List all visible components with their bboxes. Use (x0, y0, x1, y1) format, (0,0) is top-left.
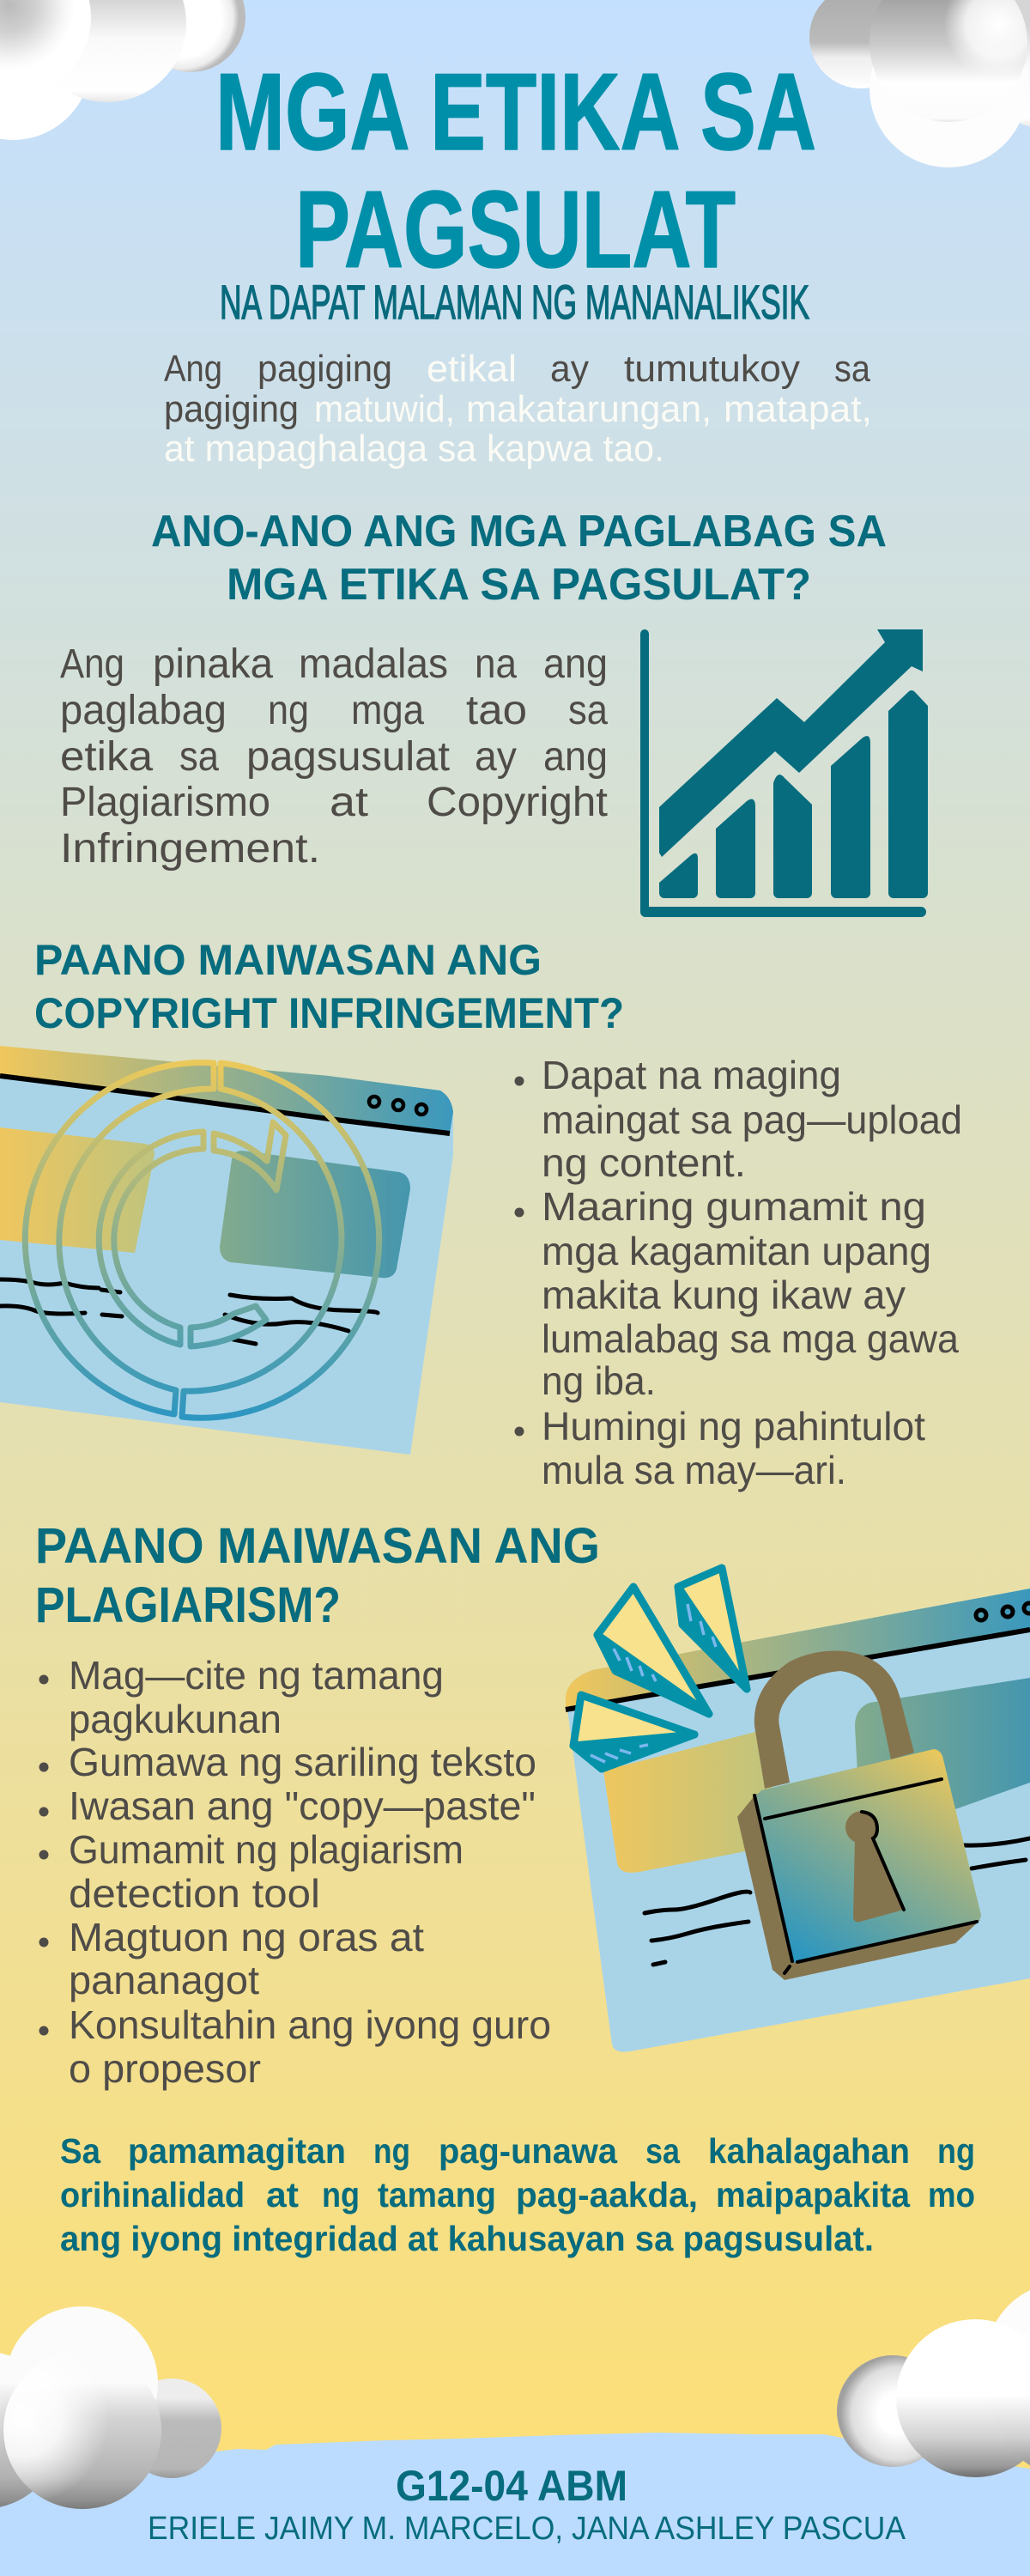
authors: ERIELE JAIMY M. MARCELO, JANA ASHLEY PASCUA (148, 2511, 906, 2547)
top right clouds (809, 0, 1030, 167)
list: copyright tips: lumalabag sa mga gawa (542, 1316, 959, 1361)
closing statement: ng (322, 2175, 360, 2215)
intro paragraph: makatarungan, (466, 388, 712, 430)
list: copyright tips: ng iba. (542, 1358, 656, 1403)
heading: copyright (34, 936, 624, 1037)
paragraph: pinaka madalas: Infringement. (60, 826, 320, 872)
burst rays (573, 1568, 747, 1769)
closing statement: Sa (60, 2131, 101, 2171)
list: copyright tips: mga kagamitan upang (542, 1229, 931, 1273)
list: plagiarism tips: detection tool (69, 1871, 320, 1916)
padlock side (737, 1794, 980, 1980)
paragraph: pinaka madalas: madalas (299, 641, 448, 687)
list: copyright tips: makita kung ikaw ay (542, 1273, 906, 1317)
paragraph: pinaka madalas: etika (60, 734, 153, 780)
list: plagiarism tips: Gumamit ng plagiarism (69, 1827, 464, 1872)
closing statement: at (266, 2175, 299, 2215)
intro paragraph: pagiging (164, 388, 299, 430)
heading: ano-ano: ANO-ANO ANG MGA PAGLABAG SA (151, 507, 887, 556)
title bar line and dots (566, 1603, 1030, 1710)
paragraph: pinaka madalas: pagsusulat (246, 734, 450, 780)
padlock front (756, 1749, 981, 1963)
illustration: browser window with padlock (566, 1568, 1030, 2052)
intro paragraph: matuwid, (314, 388, 455, 430)
intro paragraph: sa (834, 348, 870, 390)
list: plagiarism tips: Konsultahin ang iyong guro (69, 2002, 551, 2047)
list: plagiarism tips: Mag—cite ng tamang (69, 1653, 444, 1698)
intro paragraph: pagiging (258, 348, 392, 390)
closing statement: kahalagahan (708, 2131, 910, 2171)
paragraph: pinaka madalas: na (475, 641, 517, 687)
padlock shackle (754, 1650, 914, 1789)
class label: G12-04 ABM (396, 2462, 627, 2510)
paragraph: pinaka madalas: mga (351, 688, 424, 733)
title bar line and dots (0, 1076, 450, 1133)
intro paragraph: etikal (427, 348, 517, 390)
list: plagiarism tips: Gumawa ng sariling teksto (69, 1740, 536, 1784)
closing statement: orihinalidad (60, 2175, 245, 2215)
closing statement: ng (373, 2131, 410, 2171)
intro paragraph (164, 348, 872, 470)
closing statement: ang iyong integridad at kahusayan sa pagsusulat. (60, 2219, 874, 2258)
heading: ano-ano: MGA ETIKA SA PAGSULAT? (227, 560, 811, 610)
burst ray hatching (591, 1604, 716, 1762)
heading: ano-ano (151, 507, 887, 610)
heading: plagiarism (35, 1518, 600, 1633)
paragraph: pinaka madalas: paglabag (60, 688, 227, 733)
paragraph: pinaka madalas: Ang (60, 641, 124, 687)
intro paragraph: at mapaghalaga sa kapwa tao. (164, 428, 664, 470)
browser window body (0, 1046, 453, 1455)
list: copyright tips: mula sa may—ari. (542, 1448, 846, 1492)
heading: copyright: PAANO MAIWASAN ANG (34, 936, 542, 984)
browser title bar (566, 1589, 1030, 1710)
browser title bar (0, 1046, 453, 1133)
closing statement: ng (937, 2131, 975, 2171)
padlock keyhole (845, 1811, 904, 1922)
intro paragraph: tumutukoy (624, 348, 800, 390)
closing statement: mo (928, 2175, 975, 2215)
paragraph: pinaka madalas: ang (543, 641, 608, 687)
heading: plagiarism: PAANO MAIWASAN ANG (35, 1518, 600, 1574)
bottom right clouds (837, 2282, 1030, 2477)
scribble lines (645, 1838, 1030, 1965)
content blocks (603, 1728, 772, 1873)
list: copyright tips: Dapat na maging (542, 1053, 841, 1097)
paragraph: pinaka madalas: Copyright (427, 780, 608, 825)
paragraph: pinaka madalas (60, 641, 608, 872)
list: plagiarism tips (39, 1653, 551, 2091)
closing statement: pamamagitan (128, 2131, 346, 2171)
paragraph: pinaka madalas: Plagiarismo (60, 780, 270, 825)
list: copyright tips: Humingi ng pahintulot (542, 1404, 925, 1449)
footer band (0, 2433, 1030, 2576)
closing statement (60, 2131, 975, 2258)
title (215, 51, 816, 290)
paragraph: pinaka madalas: pinaka (153, 641, 273, 687)
paragraph: pinaka madalas: sa (568, 688, 608, 733)
list: copyright tips (515, 1053, 962, 1492)
heading: copyright: COPYRIGHT INFRINGEMENT? (34, 989, 624, 1037)
title: PAGSULAT (295, 168, 736, 290)
closing statement: maipapakita (716, 2175, 911, 2215)
list: plagiarism tips: Iwasan ang "copy—paste" (69, 1783, 536, 1828)
illustration: browser window with recycling arrows (0, 1046, 453, 1455)
browser window body (566, 1589, 1030, 2052)
bottom left clouds (0, 2306, 221, 2509)
intro paragraph: matapat, (724, 388, 872, 430)
heading: plagiarism: PLAGIARISM? (35, 1577, 341, 1633)
closing statement: sa (645, 2131, 681, 2171)
closing statement: pag-aakda, (516, 2175, 698, 2215)
paragraph: pinaka madalas: sa (179, 734, 219, 780)
title: MGA ETIKA SA (215, 51, 816, 173)
list: plagiarism tips: Magtuon ng oras at (69, 1915, 424, 1959)
list: plagiarism tips: o propesor (69, 2046, 261, 2091)
paragraph: pinaka madalas: at (330, 780, 368, 825)
closing statement: tamang (378, 2175, 496, 2215)
closing statement: pag-unawa (439, 2131, 618, 2171)
list: copyright tips: maingat sa pag—upload (542, 1097, 962, 1142)
paragraph: pinaka madalas: ng (268, 688, 309, 733)
padlock outlines (754, 1779, 977, 1973)
list: plagiarism tips: pananagot (69, 1958, 259, 2002)
scribble lines (0, 1279, 378, 1344)
top left clouds (0, 0, 245, 140)
intro paragraph: ay (550, 348, 589, 390)
recycling arrows (25, 1063, 379, 1418)
content blocks (0, 1127, 154, 1253)
list: copyright tips: ng content. (542, 1140, 746, 1185)
icon: rising bar chart (640, 629, 928, 917)
list: plagiarism tips: pagkukunan (69, 1697, 282, 1741)
list: copyright tips: Maaring gumamit ng (542, 1184, 926, 1229)
paragraph: pinaka madalas: ay (475, 734, 517, 780)
intro paragraph: Ang (164, 348, 222, 390)
paragraph: pinaka madalas: tao (466, 688, 527, 733)
paragraph: pinaka madalas: ang (543, 734, 608, 780)
